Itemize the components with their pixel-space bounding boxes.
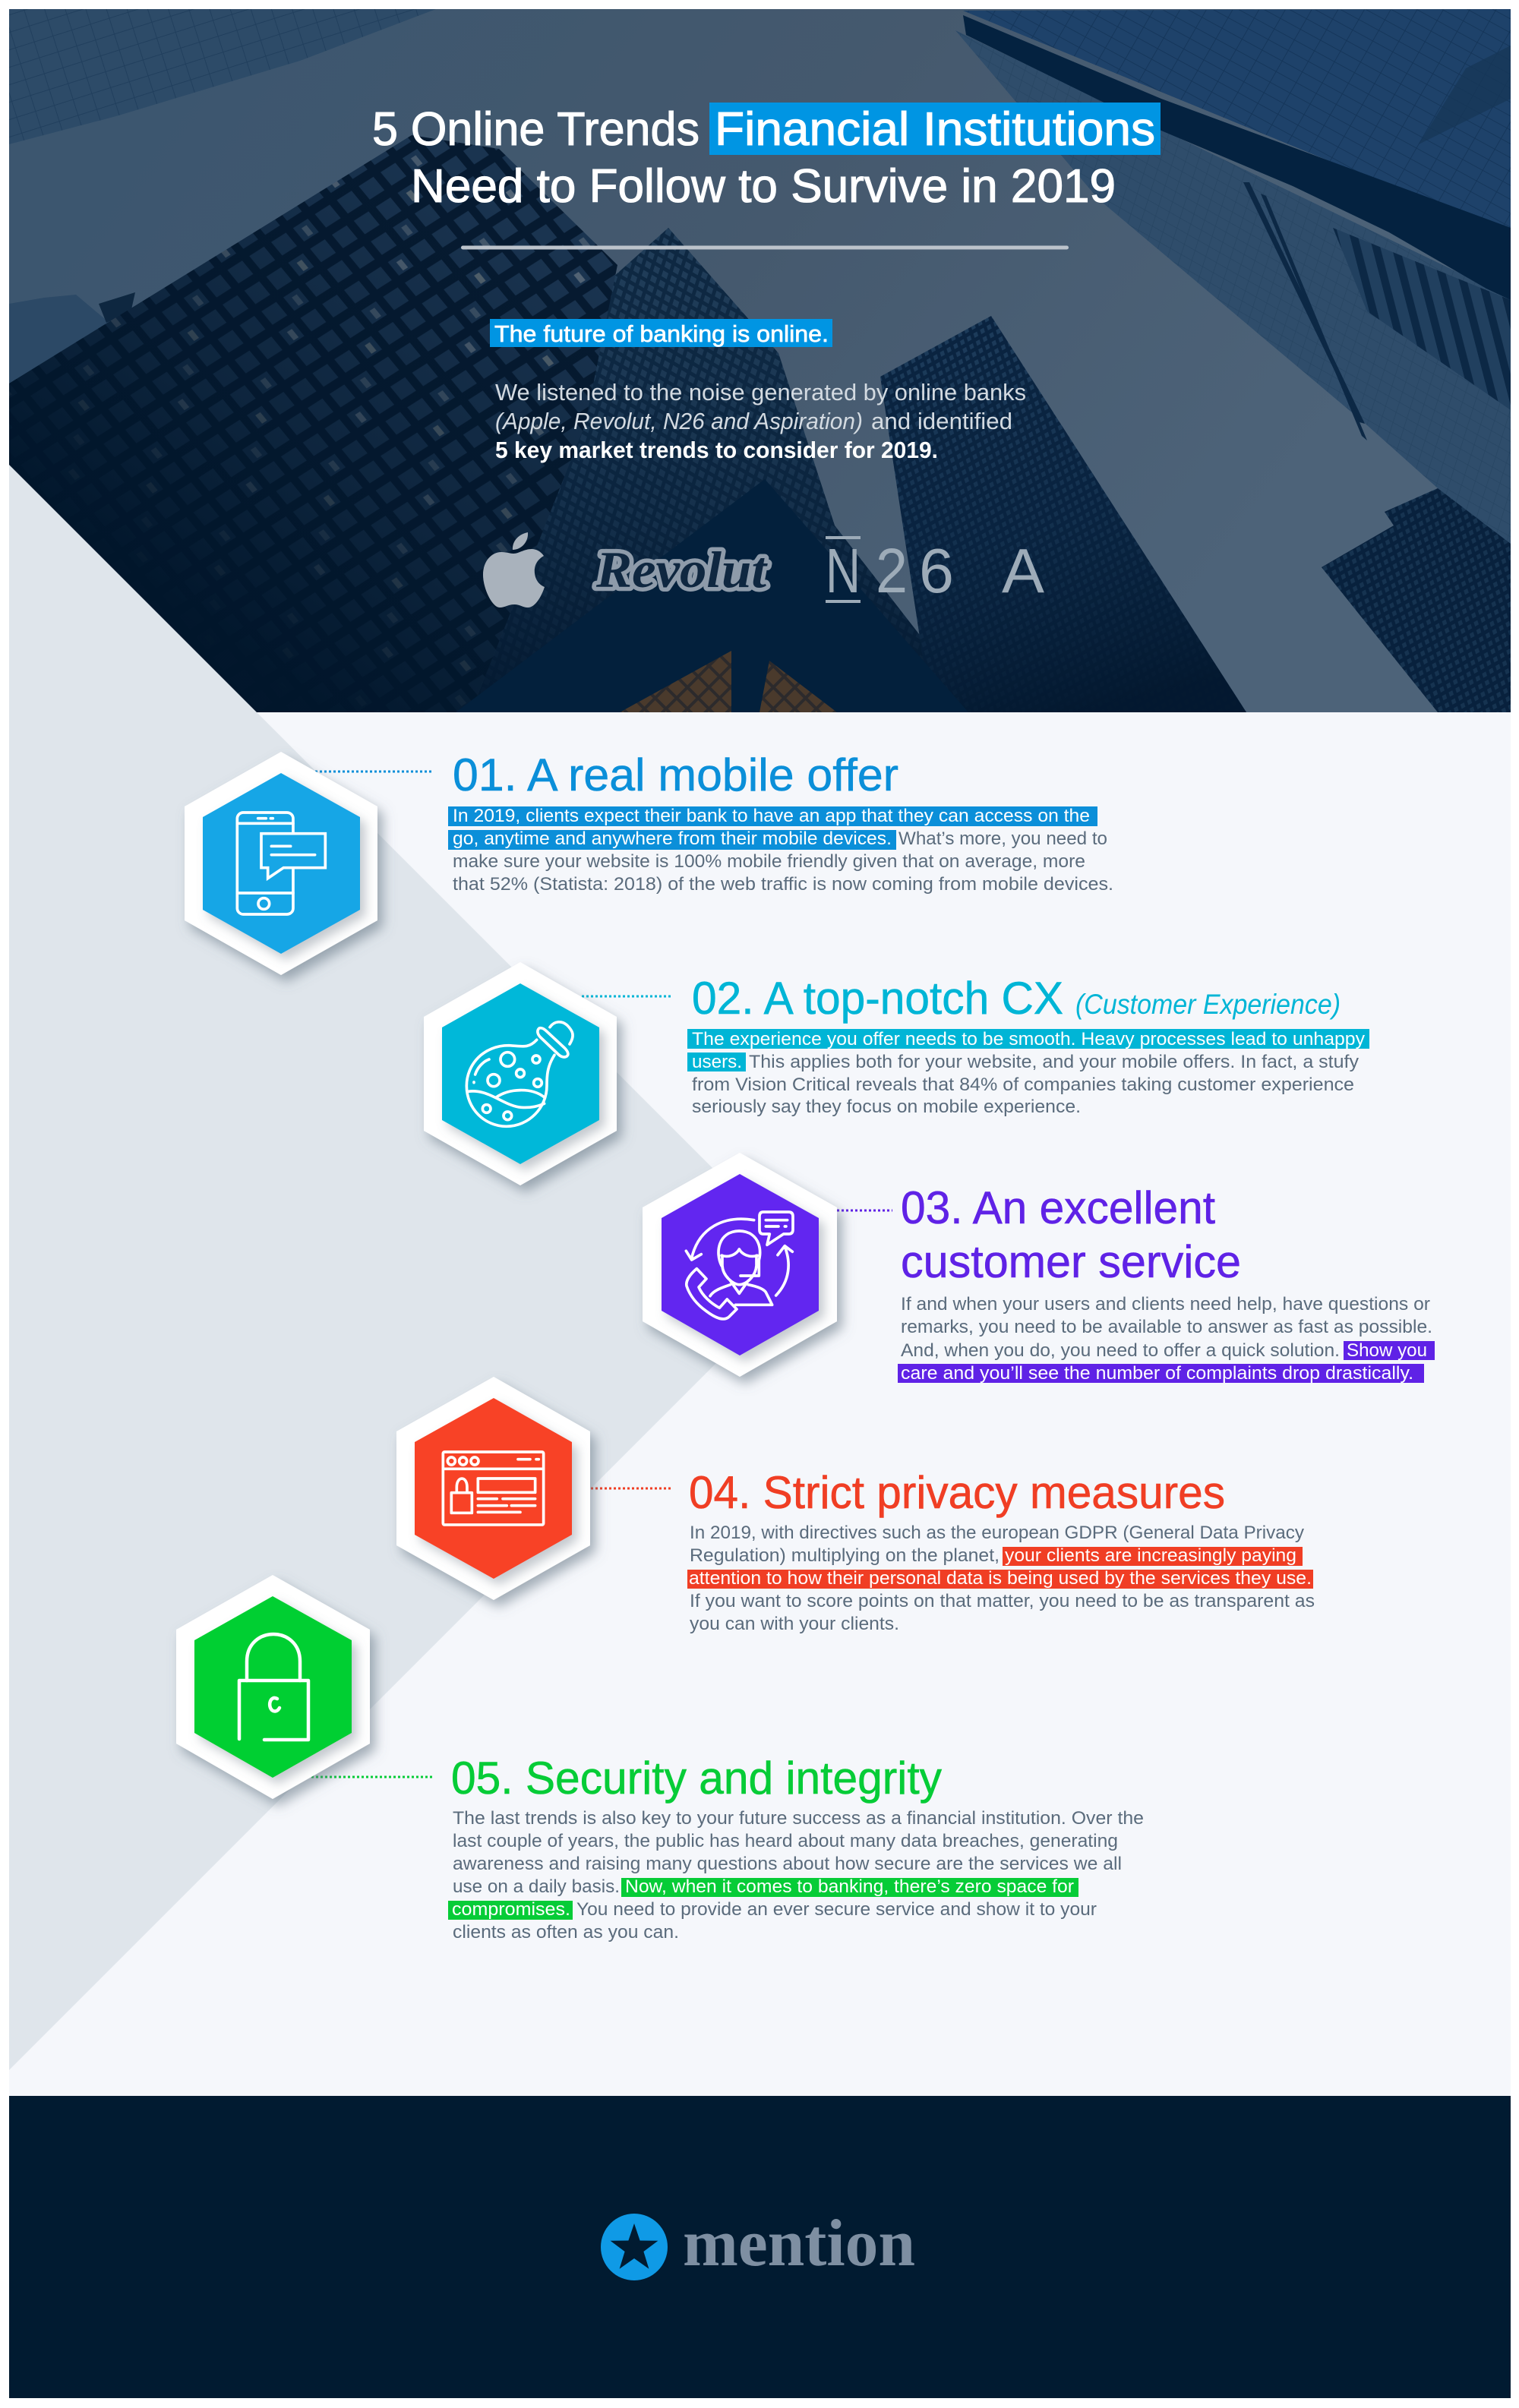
hexagon 01 — [185, 752, 377, 975]
title line 1: 5 Online Trends — [372, 103, 699, 156]
body 03: And, when you do, you need to offer a quick solution. — [901, 1340, 1340, 1361]
hexagon 02 — [424, 962, 617, 1185]
logo text: mention: mention — [683, 2207, 915, 2280]
heading 02 — [692, 973, 1341, 1024]
intro highlight — [490, 319, 832, 347]
body 05: The last trends is also key to your future success as a financial institution. Over the — [453, 1808, 1144, 1829]
hexagon 05 — [176, 1575, 370, 1799]
trend 04 — [396, 1377, 1315, 1634]
icon: apple logo — [483, 532, 545, 608]
body 04: you can with your clients. — [690, 1614, 899, 1634]
body 04: In 2019, with directives such as the european GDPR (General Data Privacy — [690, 1523, 1304, 1543]
logo: N26: 6 — [919, 535, 954, 606]
body 05: compromises. — [452, 1899, 570, 1920]
title line 1 — [372, 103, 1155, 213]
heading 03: 03. An excellent — [901, 1182, 1215, 1233]
heading 04: 04. Strict privacy measures — [689, 1467, 1225, 1518]
body 05: last couple of years, the public has heard about many data breaches, generating — [453, 1831, 1118, 1851]
panel: light content area — [9, 712, 1511, 2096]
body 03: If and when your users and clients need help, have questions or — [901, 1294, 1430, 1314]
body 05: You need to provide an ever secure service and show it to your — [576, 1899, 1097, 1920]
icon: mention star logo — [601, 2214, 668, 2280]
heading 03 — [901, 1182, 1241, 1287]
body 01 — [448, 806, 1113, 895]
body 01: go, anytime and anywhere from their mobile devices. — [453, 828, 892, 849]
body 04: Regulation) multiplying on the planet, — [690, 1545, 1000, 1566]
connector 03 — [837, 1209, 892, 1212]
intro text block — [490, 319, 1026, 463]
connector 05 — [311, 1775, 433, 1778]
connector 04 — [591, 1487, 672, 1490]
heading 01: 01. A real mobile offer — [453, 750, 898, 800]
icon: customer support agent — [686, 1212, 793, 1319]
body 05: awareness and raising many questions about how secure are the services we all — [453, 1854, 1122, 1874]
panel: diagonal grey triangle — [9, 465, 812, 2070]
body 05: Now, when it comes to banking, there’s zero space for — [625, 1876, 1074, 1897]
footer band — [9, 2096, 1511, 2398]
body 04: your clients are increasingly paying — [1005, 1545, 1296, 1566]
title line 1: Need to Follow to Survive in 2019 — [411, 160, 1116, 213]
connector 02 — [582, 995, 673, 998]
title highlight — [709, 103, 1161, 155]
body 03: Show you — [1347, 1340, 1427, 1361]
trend 03 — [643, 1153, 1435, 1384]
body 05: use on a daily basis. — [453, 1876, 620, 1897]
logo: N26 — [826, 535, 954, 606]
body 03: remarks, you need to be available to answer as fast as possible. — [901, 1317, 1432, 1337]
body 01: that 52% (Statista: 2018) of the web traffic is now coming from mobile devices. — [453, 874, 1113, 895]
body 02: from Vision Critical reveals that 84% of companies taking customer experience — [692, 1075, 1354, 1095]
logo: Revolut: Revolut — [595, 541, 768, 598]
heading 03: customer service — [901, 1236, 1241, 1287]
title line 1: Financial Institutions — [715, 103, 1155, 156]
body 03: care and you’ll see the number of complaints drop drastically. — [901, 1363, 1413, 1384]
body 01: make sure your website is 100% mobile friendly given that on average, more — [453, 851, 1085, 872]
trend 02 — [424, 962, 1369, 1185]
logo: N26: 2 — [876, 535, 908, 606]
panel: hero skyscraper photo — [9, 9, 1511, 712]
heading 05: 05. Security and integrity — [451, 1753, 942, 1804]
intro paragraph: We listened to the noise generated by online banks — [495, 379, 1026, 406]
body 05 — [448, 1808, 1144, 1942]
heading 02: (Customer Experience) — [1075, 989, 1341, 1020]
title — [372, 103, 1161, 213]
body 02 — [687, 1029, 1369, 1117]
body 02: seriously say they focus on mobile experience. — [692, 1097, 1081, 1117]
body 04 — [687, 1523, 1315, 1634]
icon: padlock — [239, 1634, 308, 1740]
logo: Aspiration A: A — [1002, 535, 1045, 606]
hexagon 03 — [643, 1153, 837, 1377]
icon: phone with chat bubble — [237, 813, 325, 914]
icon: flask — [466, 1022, 573, 1126]
body 03 — [898, 1294, 1435, 1384]
trend 05 — [176, 1575, 1144, 1942]
intro paragraph — [495, 379, 1026, 463]
icon: browser window with padlock — [443, 1452, 544, 1525]
intro heading: The future of banking is online. — [494, 320, 829, 347]
body 01: In 2019, clients expect their bank to have an app that they can access on the — [453, 806, 1090, 826]
intro paragraph: (Apple, Revolut, N26 and Aspiration) — [495, 408, 863, 434]
trend 01 — [185, 750, 1113, 975]
body 02: users. — [692, 1052, 742, 1072]
heading 02: 02. A top-notch CX — [692, 973, 1063, 1024]
body 04: attention to how their personal data is being used by the services they use. — [689, 1568, 1312, 1589]
connector 01 — [315, 770, 433, 773]
body 01: What’s more, you need to — [898, 828, 1107, 849]
bank logos — [483, 532, 1045, 608]
hexagon 04 — [396, 1377, 590, 1600]
body 02: The experience you offer needs to be smooth. Heavy processes lead to unhappy — [692, 1029, 1365, 1049]
logo: N26: N — [826, 535, 861, 606]
body 04: If you want to score points on that matter, you need to be as transparent as — [690, 1591, 1315, 1611]
intro paragraph: 5 key market trends to consider for 2019. — [495, 437, 938, 463]
intro paragraph: and identified — [871, 408, 1012, 434]
body 02: This applies both for your website, and your mobile offers. In fact, a stufy — [749, 1052, 1359, 1072]
body 05: clients as often as you can. — [453, 1922, 679, 1942]
